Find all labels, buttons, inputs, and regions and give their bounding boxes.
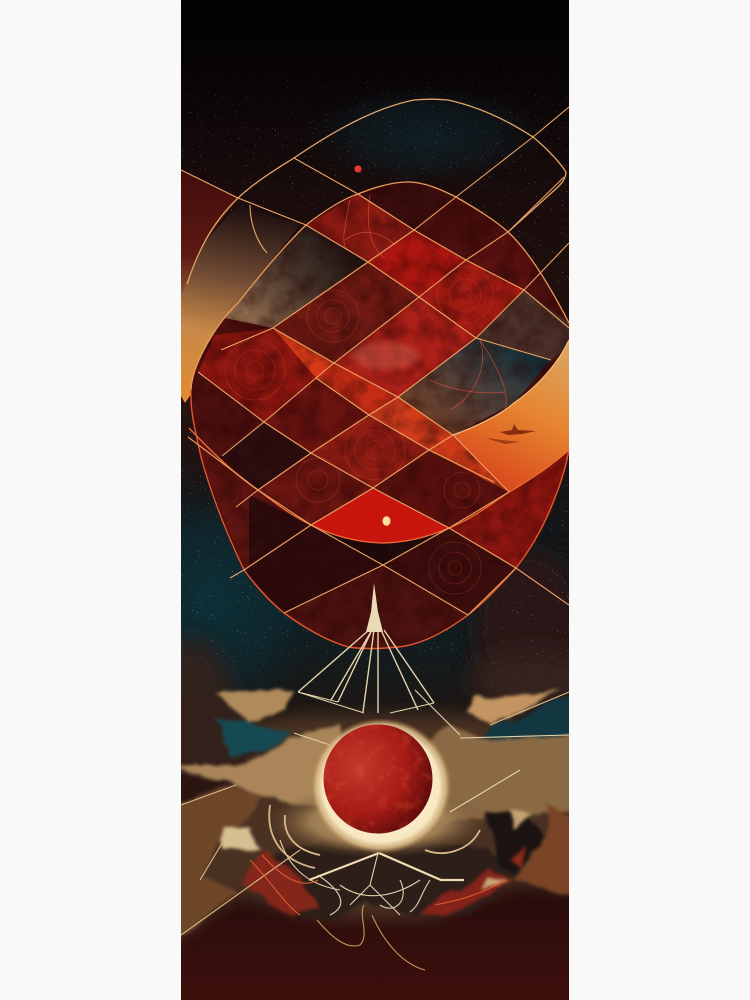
painted shards	[170, 692, 585, 944]
left brown field	[181, 698, 262, 766]
outer contour loop	[187, 99, 566, 284]
diamond lattice lines	[181, 107, 569, 615]
star field	[181, 40, 569, 720]
lattice body	[181, 170, 569, 660]
teal shard left	[214, 717, 294, 755]
brown lower right	[514, 804, 569, 896]
pale cloud	[351, 342, 419, 370]
floor	[181, 929, 569, 1000]
crescent outline	[453, 340, 569, 435]
teal shard right	[482, 696, 569, 742]
brown lower left	[181, 786, 260, 938]
red wedge left	[244, 850, 322, 917]
dark right pocket	[484, 813, 548, 877]
dark red top-left wedge	[181, 170, 238, 300]
left orange glow	[181, 205, 300, 403]
tan plain right	[429, 724, 569, 822]
texture	[181, 170, 569, 660]
upper cells	[198, 180, 569, 492]
poster artwork	[181, 0, 569, 1000]
red bowl outline	[191, 390, 569, 648]
crescent islands	[485, 424, 536, 444]
tan shard right	[464, 692, 559, 725]
glowing dot	[382, 516, 390, 526]
tan shard left	[218, 692, 294, 725]
cream shard	[224, 827, 258, 850]
swirl details	[225, 195, 506, 594]
dark wedge left	[181, 772, 232, 803]
orange crescent	[453, 340, 569, 492]
lower landscape	[170, 692, 585, 1000]
cream shard right	[478, 878, 512, 890]
glow under planet	[266, 786, 490, 858]
inner contour arc	[191, 182, 569, 390]
spire and web	[181, 583, 569, 970]
red planet	[320, 720, 436, 836]
landscape underlay	[170, 715, 585, 944]
lower cells	[245, 526, 514, 614]
planet halo	[310, 718, 452, 854]
background sky	[181, 0, 569, 773]
inner bowl curve	[189, 428, 569, 543]
tan plain left	[170, 725, 340, 810]
dark web base	[260, 845, 514, 918]
red wedge right	[421, 870, 514, 917]
middle cells	[188, 372, 569, 570]
small red dot	[354, 165, 362, 173]
bright bowl cell	[311, 488, 449, 543]
